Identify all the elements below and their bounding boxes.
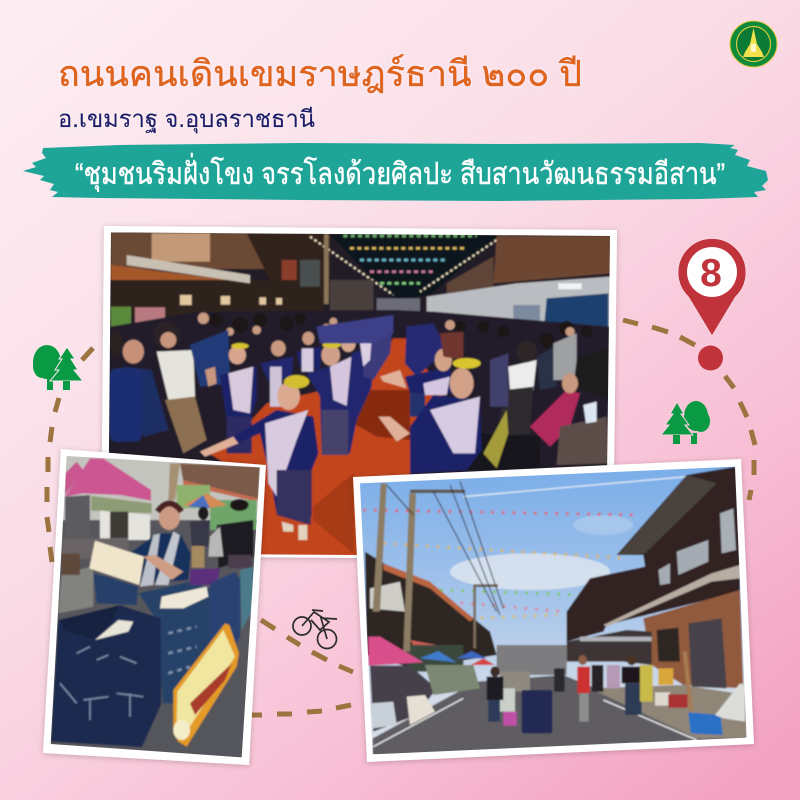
main dancer right xyxy=(410,395,482,473)
fabric motifs xyxy=(60,647,143,720)
crowd base xyxy=(110,310,609,336)
logo xyxy=(730,21,777,67)
bunting xyxy=(363,510,640,618)
stall tables and street xyxy=(62,538,128,558)
title: ถนนคนเดินเขมราษฎร์ธานี ๒๐๐ ปี xyxy=(58,53,582,94)
right stall xyxy=(607,665,620,688)
icon: bicycle xyxy=(293,610,337,648)
right building xyxy=(493,236,610,283)
pin number: 8 xyxy=(700,252,722,295)
road xyxy=(142,637,240,749)
tent xyxy=(65,462,83,495)
right buildings xyxy=(567,467,740,642)
indigo fabric xyxy=(93,573,138,605)
woman xyxy=(130,533,191,583)
photo: street with stalls and lanterns xyxy=(350,455,760,765)
passers-by xyxy=(190,520,210,547)
icon: trees right xyxy=(661,401,710,444)
small dancers xyxy=(220,367,257,420)
photo: dancers parade xyxy=(100,220,620,560)
subtitle: อ.เขมราฐ จ.อุบลราชธานี xyxy=(58,106,315,134)
center stall xyxy=(500,672,530,692)
umbrella xyxy=(183,493,227,508)
carpet xyxy=(210,337,444,555)
photo: woman selling indigo cloth xyxy=(40,440,273,773)
sign xyxy=(173,623,239,747)
icon: red location dot xyxy=(698,346,723,370)
right spectators xyxy=(440,332,463,360)
main dancer left xyxy=(233,410,318,517)
poles xyxy=(373,483,387,612)
upper background xyxy=(60,453,267,520)
left stalls xyxy=(368,637,423,666)
night sky xyxy=(330,235,500,300)
people xyxy=(487,677,503,700)
route: dashed path right xyxy=(623,320,755,500)
ground xyxy=(373,675,747,755)
far rows xyxy=(317,315,393,343)
right dancer 3 xyxy=(405,367,453,393)
icon: trees left xyxy=(33,345,83,390)
crowd heads xyxy=(209,312,593,347)
banner: quote xyxy=(23,143,768,201)
icon: map pin number 8 xyxy=(678,238,746,336)
far street xyxy=(497,645,567,675)
cream cloth xyxy=(89,541,144,585)
route: dashed path bottom xyxy=(252,620,353,715)
left spectators xyxy=(158,338,160,341)
left building xyxy=(111,232,318,269)
left building xyxy=(365,552,497,668)
route: dashed path left xyxy=(47,348,93,562)
